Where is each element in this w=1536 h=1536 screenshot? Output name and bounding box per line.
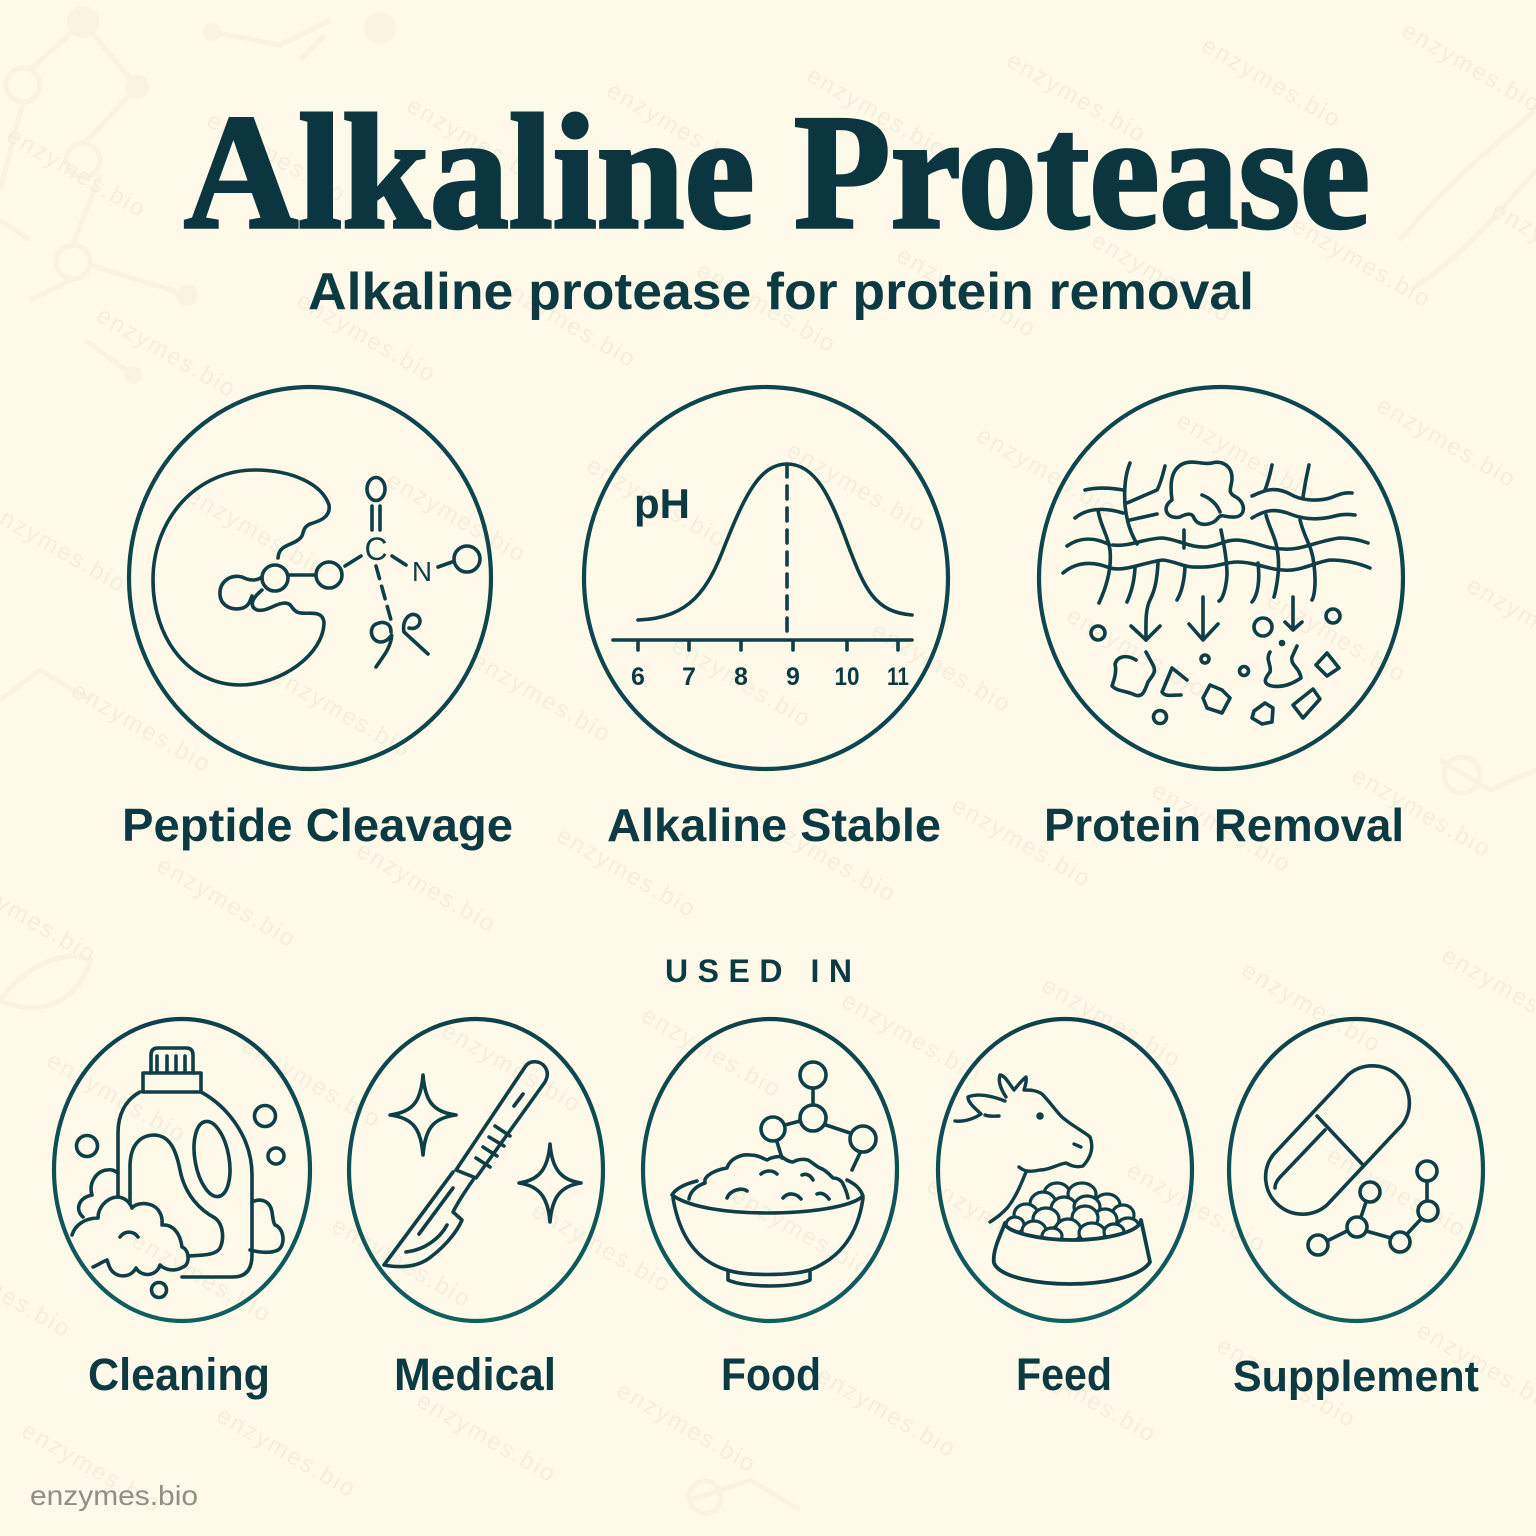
circle outline [129,387,491,769]
watermark pattern: enzymes.bio [352,837,501,939]
ph label: pH [634,480,690,527]
label: Cleaning: Cleaning [88,1349,270,1400]
watermark pattern: enzymes.bio [692,257,841,359]
icon: sparkles [390,1075,581,1222]
watermark pattern: enzymes.bio [17,1417,166,1519]
label: Alkaline Stable: Alkaline Stable [607,799,941,851]
label: Peptide Cleavage: Peptide Cleavage [122,799,513,851]
watermark pattern: enzymes.bio [1197,32,1346,134]
label: Medical: Medical [394,1349,556,1400]
icon: bowl of food [672,1155,863,1286]
watermark pattern: enzymes.bio [582,452,731,554]
watermark pattern: enzymes.bio [1002,47,1151,149]
watermark pattern: enzymes.bio [182,482,331,584]
circle outline [1229,1019,1483,1321]
panel: medical [349,1019,603,1321]
watermark pattern: enzymes.bio [402,92,551,194]
circle outline [643,1019,897,1321]
watermark pattern: enzymes.bio [1237,957,1386,1059]
watermark pattern: enzymes.bio [1347,762,1496,864]
icon: molecule [761,1062,876,1170]
watermark pattern: enzymes.bio [92,302,241,404]
panel: protein removal [1039,387,1403,769]
watermark pattern: enzymes.bio [1287,212,1436,314]
watermark pattern: enzymes.bio [612,1377,761,1479]
watermark pattern: enzymes.bio [1147,777,1296,879]
title: Alkaline Protease [184,82,1370,263]
watermark pattern: enzymes.bio [1372,392,1521,494]
watermark pattern: enzymes.bio [292,287,441,389]
footer brand: enzymes.bio [30,1480,198,1511]
panel: feed [938,1019,1192,1321]
label: Protein Removal: Protein Removal [1044,799,1404,851]
icon: capsule [1266,1066,1409,1214]
watermark pattern: enzymes.bio [1212,1332,1361,1434]
watermark pattern: enzymes.bio [527,1197,676,1299]
watermark pattern: enzymes.bio [202,107,351,209]
watermark pattern: enzymes.bio [1172,407,1321,509]
watermark pattern: enzymes.bio [437,1017,586,1119]
circle outline [1039,387,1403,769]
chart: pH curve [613,464,912,650]
watermark pattern: enzymes.bio [1322,1142,1471,1244]
label: Supplement: Supplement [1233,1352,1479,1401]
icon: scissors [371,614,428,667]
watermark pattern: enzymes.bio [1262,587,1411,689]
watermark pattern: enzymes.bio [727,1182,876,1284]
icon: cow [955,1075,1092,1222]
panel: alkaline stable [584,387,948,769]
icon: peptide chain [220,478,480,620]
axis labels: 6 [631,663,645,691]
watermark pattern: enzymes.bio [867,617,1016,719]
icon: bond letters: N [412,556,432,587]
watermark pattern: enzymes.bio [802,62,951,164]
label: Food: Food [721,1349,821,1400]
circle outline [54,1019,310,1321]
watermark pattern: enzymes.bio [267,662,416,764]
watermark pattern: enzymes.bio [1037,972,1186,1074]
icon: eye [1036,1112,1044,1120]
panel: supplement [1229,1019,1483,1321]
icon: bond letters [364,531,432,587]
watermark pattern: enzymes.bio [922,1172,1071,1274]
icon: detergent bottle [118,1048,252,1277]
watermark pattern: enzymes.bio [2,122,151,224]
watermark pattern: enzymes.bio [602,77,751,179]
axis labels: 9 [786,663,800,691]
watermark pattern: enzymes.bio [127,1227,276,1329]
watermark pattern: enzymes.bio [492,272,641,374]
axis labels: 8 [734,663,748,691]
watermark pattern: enzymes.bio [382,467,531,569]
icon: protein stain [1166,462,1243,524]
circle outline [349,1019,603,1321]
subtitle: Alkaline protease for protein removal [308,263,1254,321]
icon: down arrows [1131,597,1302,640]
axis labels [631,663,909,691]
label: Feed: Feed [1016,1349,1112,1400]
watermark pattern: enzymes.bio [947,792,1096,894]
watermark pattern: enzymes.bio [552,822,701,924]
icon: foam [72,1170,283,1276]
watermark pattern: enzymes.bio [1087,227,1236,329]
axis labels: 11 [887,663,909,691]
watermark pattern: enzymes.bio [327,1212,476,1314]
watermark pattern: enzymes.bio [972,422,1121,524]
panel: food [643,1019,897,1321]
watermark pattern: enzymes.bio [782,437,931,539]
watermark pattern: enzymes.bio [1012,1347,1161,1449]
watermark pattern: enzymes.bio [212,1402,361,1504]
watermark pattern: enzymes.bio [42,1047,191,1149]
watermark pattern: enzymes.bio [412,1387,561,1489]
icon: molecule [1308,1161,1438,1255]
watermark pattern: enzymes.bio [837,987,986,1089]
icon: bubbles [76,1106,284,1298]
axis labels: 7 [682,663,696,691]
watermark pattern: enzymes.bio [67,677,216,779]
circle outline [584,387,948,769]
icon: scalpel [384,1062,547,1267]
icon: fibre mesh [1063,463,1370,640]
circle outline [938,1019,1192,1321]
watermark pattern: enzymes.bio [812,1362,961,1464]
watermark pattern: enzymes.bio [467,647,616,749]
icon: fragments [1091,609,1340,724]
watermark pattern: enzymes.bio [892,242,1041,344]
watermark pattern: enzymes.bio [667,632,816,734]
panel: cleaning [54,1019,310,1321]
watermark pattern: enzymes.bio [637,1002,786,1104]
panel: peptide cleavage [129,387,491,769]
watermark pattern: enzymes.bio [752,807,901,909]
icon: bond letters: C [364,531,388,567]
watermark pattern: enzymes.bio [237,1032,386,1134]
watermark pattern: enzymes.bio [152,852,301,954]
icon: enzyme pacman [153,470,329,685]
watermark pattern: enzymes.bio [1122,1157,1271,1259]
section heading: used in: USED IN [665,953,852,989]
icon: feed bowl [994,1220,1150,1284]
axis labels: 10 [834,663,860,691]
icon: feed pellets [1006,1183,1139,1244]
watermark pattern: enzymes.bio [1062,602,1211,704]
